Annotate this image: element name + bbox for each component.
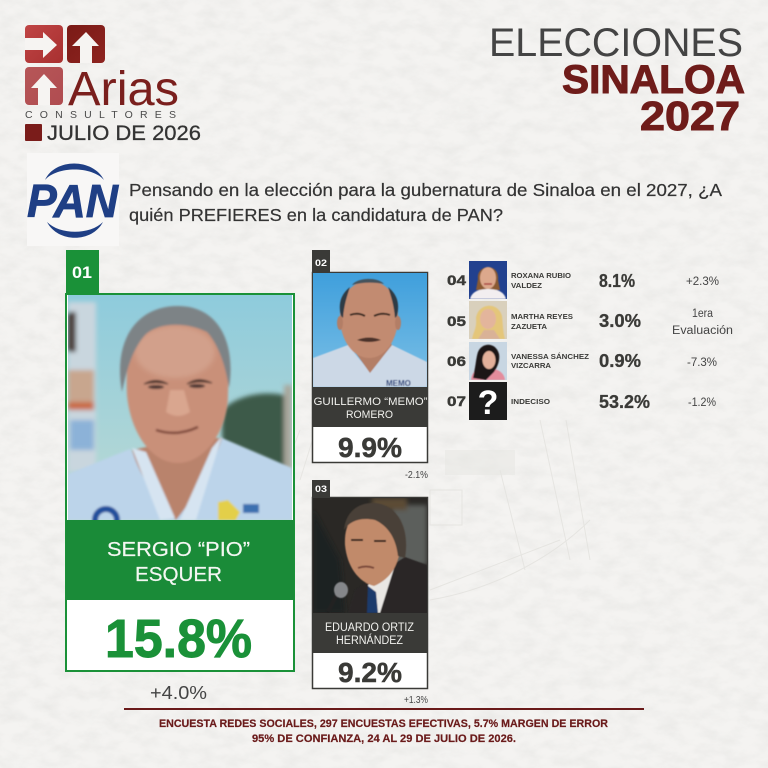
row: candidate 06 Vanessa Sanchez Vizcarra [447,342,717,380]
icon: up arrow dark square [67,25,105,63]
footer: survey methodology: ENCUESTA REDES SOCIALES, 297 ENCUESTAS EFECTIVAS, 5.7% MARGEN DE ERROR [159,718,608,730]
logo wordmark: Arias [68,63,179,116]
icon: question mark [469,382,507,422]
name band: HERNÁNDEZ [336,634,403,647]
row: 07 Indeciso [447,382,716,422]
title: 2027 [640,93,740,139]
title [489,21,745,139]
row: candidate 04 Roxana Rubio Valdez: VALDEZ [511,283,543,290]
portrait: Vanessa Sanchez [469,342,507,380]
rank tab 01: 01 [72,263,92,282]
name band: ROMERO [346,409,393,421]
panel: candidate 02 Guillermo Memo Romero [312,250,428,463]
row: candidate 04 Roxana Rubio Valdez: 8.1% [599,271,635,291]
name band [312,387,428,427]
question text: quién PREFIERES en la candidatura de PAN? [129,205,503,225]
name band: GUILLERMO “MEMO” [314,396,428,408]
row: 07 Indeciso: INDECISO [511,399,551,406]
row: candidate 04 Roxana Rubio Valdez [447,261,719,299]
date: julio de 2026: JULIO DE 2026 [47,122,201,145]
rank tab 02 [312,250,330,273]
name band [66,520,294,600]
change 02: -2.1% [405,470,428,481]
portrait: Eduardo Ortiz Hernandez [313,498,427,613]
logo subtitle: CONSULTORES [25,109,176,121]
icon: right arrow square [25,25,63,63]
row: candidate 05 Martha Reyes Zazueta: 3.0% [599,311,641,331]
row: candidate 05 Martha Reyes Zazueta: Evaluación [672,325,733,337]
row: 07 Indeciso: -1.2% [688,397,716,409]
question text [129,180,722,225]
footer: survey methodology: 95% DE CONFIANZA, 24 AL 29 DE JULIO DE 2026. [252,733,516,745]
panel: candidate 01 Sergio Pio Esquer [66,250,294,671]
icon: question mark: ? [478,384,498,422]
row: candidate 05 Martha Reyes Zazueta: MARTHA REYES [511,314,573,321]
name band: EDUARDO ORTIZ [325,622,414,634]
portrait: Roxana Rubio [469,261,507,299]
row: candidate 06 Vanessa Sanchez Vizcarra: 0.9% [599,351,641,371]
portrait: Guillermo Memo Romero: MEMO [386,379,411,388]
row: 07 Indeciso: 07 [447,393,466,409]
portrait: Guillermo Memo Romero [313,273,427,388]
footer: survey methodology [124,708,644,745]
change 01: +4.0% [150,683,207,703]
question text: Pensando en la elección para la gubernatura de Sinaloa en el 2027, ¿A [129,180,722,200]
name band: SERGIO “PIO” [107,539,250,561]
rank tab 03: 03 [315,484,327,494]
portrait: Martha Reyes [469,301,507,339]
icon: up arrow light square [25,67,63,105]
row: candidate 05 Martha Reyes Zazueta: ZAZUETA [511,324,547,331]
row: candidate 04 Roxana Rubio Valdez: +2.3% [686,276,719,288]
row: candidate 05 Martha Reyes Zazueta: 05 [447,313,466,329]
icon: PAN party logo [27,153,119,246]
icon: PAN party logo: PAN [27,175,119,227]
rank tab 02: 02 [315,258,327,268]
row: candidate 06 Vanessa Sanchez Vizcarra: VANESSA SÁNCHEZ [511,352,590,361]
portrait: Sergio Pio Esquer [68,295,292,531]
row: 07 Indeciso: 53.2% [599,392,650,412]
change 03: +1.3% [404,695,428,706]
row: candidate 06 Vanessa Sanchez Vizcarra: -7.3% [687,357,717,369]
title: ELECCIONES [489,21,743,65]
row: candidate 06 Vanessa Sanchez Vizcarra: VIZCARRA [511,363,551,370]
result percentage: 9.9% [338,432,402,463]
rank tab 01 [66,250,99,294]
name band [312,613,428,653]
title: SINALOA [562,58,745,102]
result percentage: 15.8% [105,609,252,669]
result percentage: 9.2% [338,657,402,688]
rank tab 03 [312,480,330,498]
row: candidate 05 Martha Reyes Zazueta [447,301,733,339]
row: candidate 04 Roxana Rubio Valdez: ROXANA RUBIO [511,273,572,280]
logo: Arias Consultores [25,25,179,121]
row: candidate 06 Vanessa Sanchez Vizcarra: 06 [447,353,466,369]
row: candidate 05 Martha Reyes Zazueta: 1era [692,308,714,320]
name band: ESQUER [135,564,222,586]
panel: candidate 03 Eduardo Ortiz Hernandez [312,480,428,688]
row: candidate 04 Roxana Rubio Valdez: 04 [447,272,466,288]
